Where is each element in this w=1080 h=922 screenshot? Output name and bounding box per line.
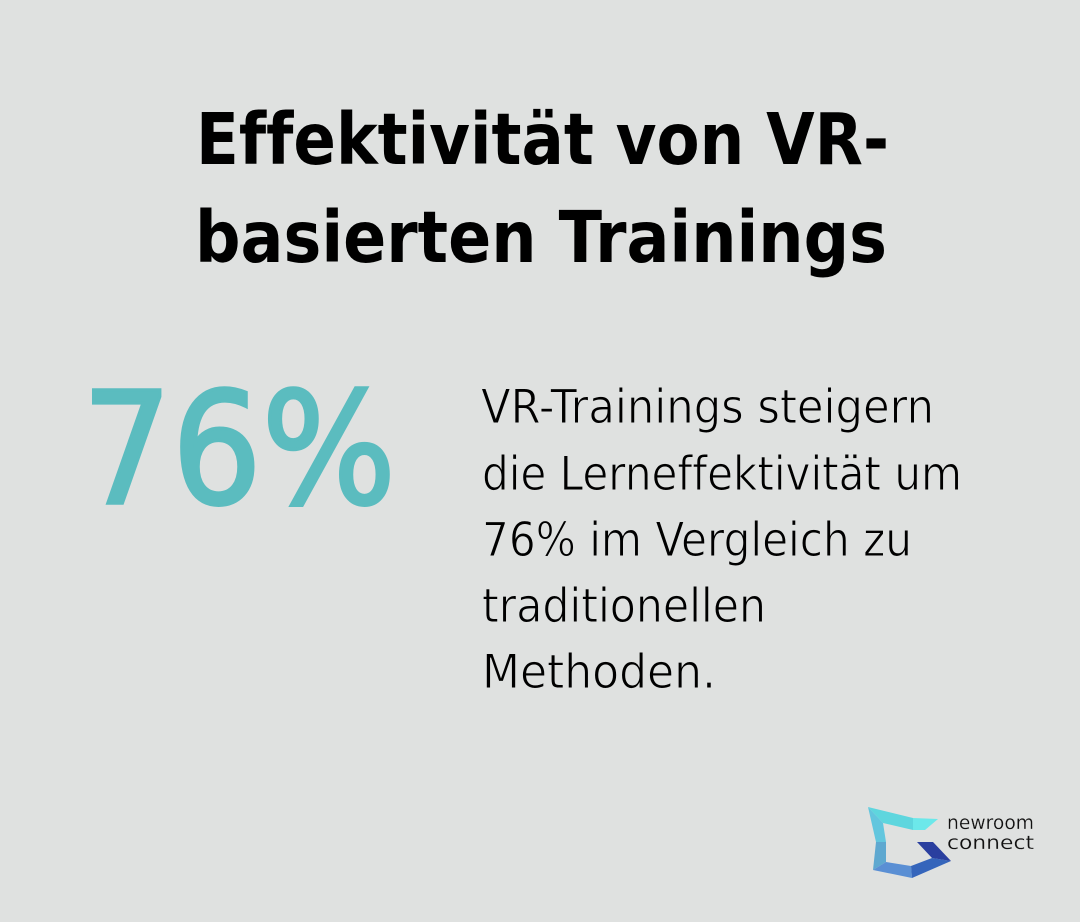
description text: Methoden. bbox=[482, 645, 716, 700]
title: basierten Trainings bbox=[195, 196, 887, 279]
logo wordmark bbox=[947, 813, 1034, 854]
big statistic: 76%: 76% bbox=[82, 359, 396, 540]
logo wordmark: newroom bbox=[947, 813, 1034, 834]
title: Effektivität von VR- bbox=[196, 98, 889, 181]
description text: 76% im Vergleich zu bbox=[482, 513, 912, 568]
title bbox=[195, 98, 889, 279]
logo wordmark: connect bbox=[947, 833, 1034, 854]
description text: VR-Trainings steigern bbox=[481, 380, 934, 435]
description text bbox=[481, 380, 962, 700]
icon: logo mark bbox=[868, 807, 951, 878]
description text: die Lerneffektivität um bbox=[482, 447, 962, 502]
description text: traditionellen bbox=[482, 579, 766, 634]
logo: newroom connect bbox=[868, 807, 1034, 878]
